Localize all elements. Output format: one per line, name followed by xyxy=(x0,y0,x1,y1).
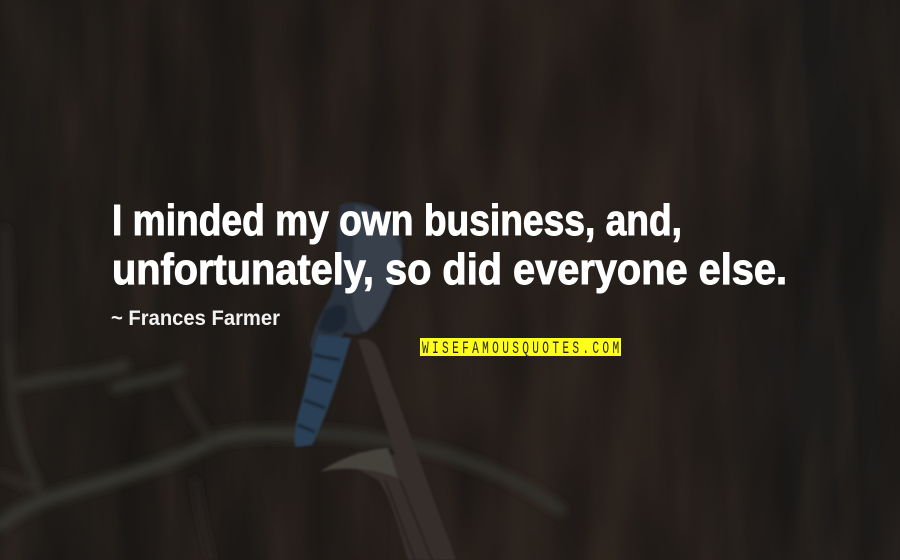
quote text: I minded my own business, and, xyxy=(112,196,682,245)
illustration: blue jay bird perched on a branch xyxy=(294,202,456,560)
branch perch xyxy=(320,339,456,560)
blurred background branches xyxy=(0,230,560,560)
watermark badge: WISEFAMOUSQUOTES.COM xyxy=(422,340,619,359)
author attribution: ~ Frances Farmer xyxy=(111,307,280,330)
quote text xyxy=(112,196,787,294)
quote text: unfortunately, so did everyone else. xyxy=(112,245,787,294)
bird tail xyxy=(294,335,351,447)
bird body xyxy=(310,202,402,375)
